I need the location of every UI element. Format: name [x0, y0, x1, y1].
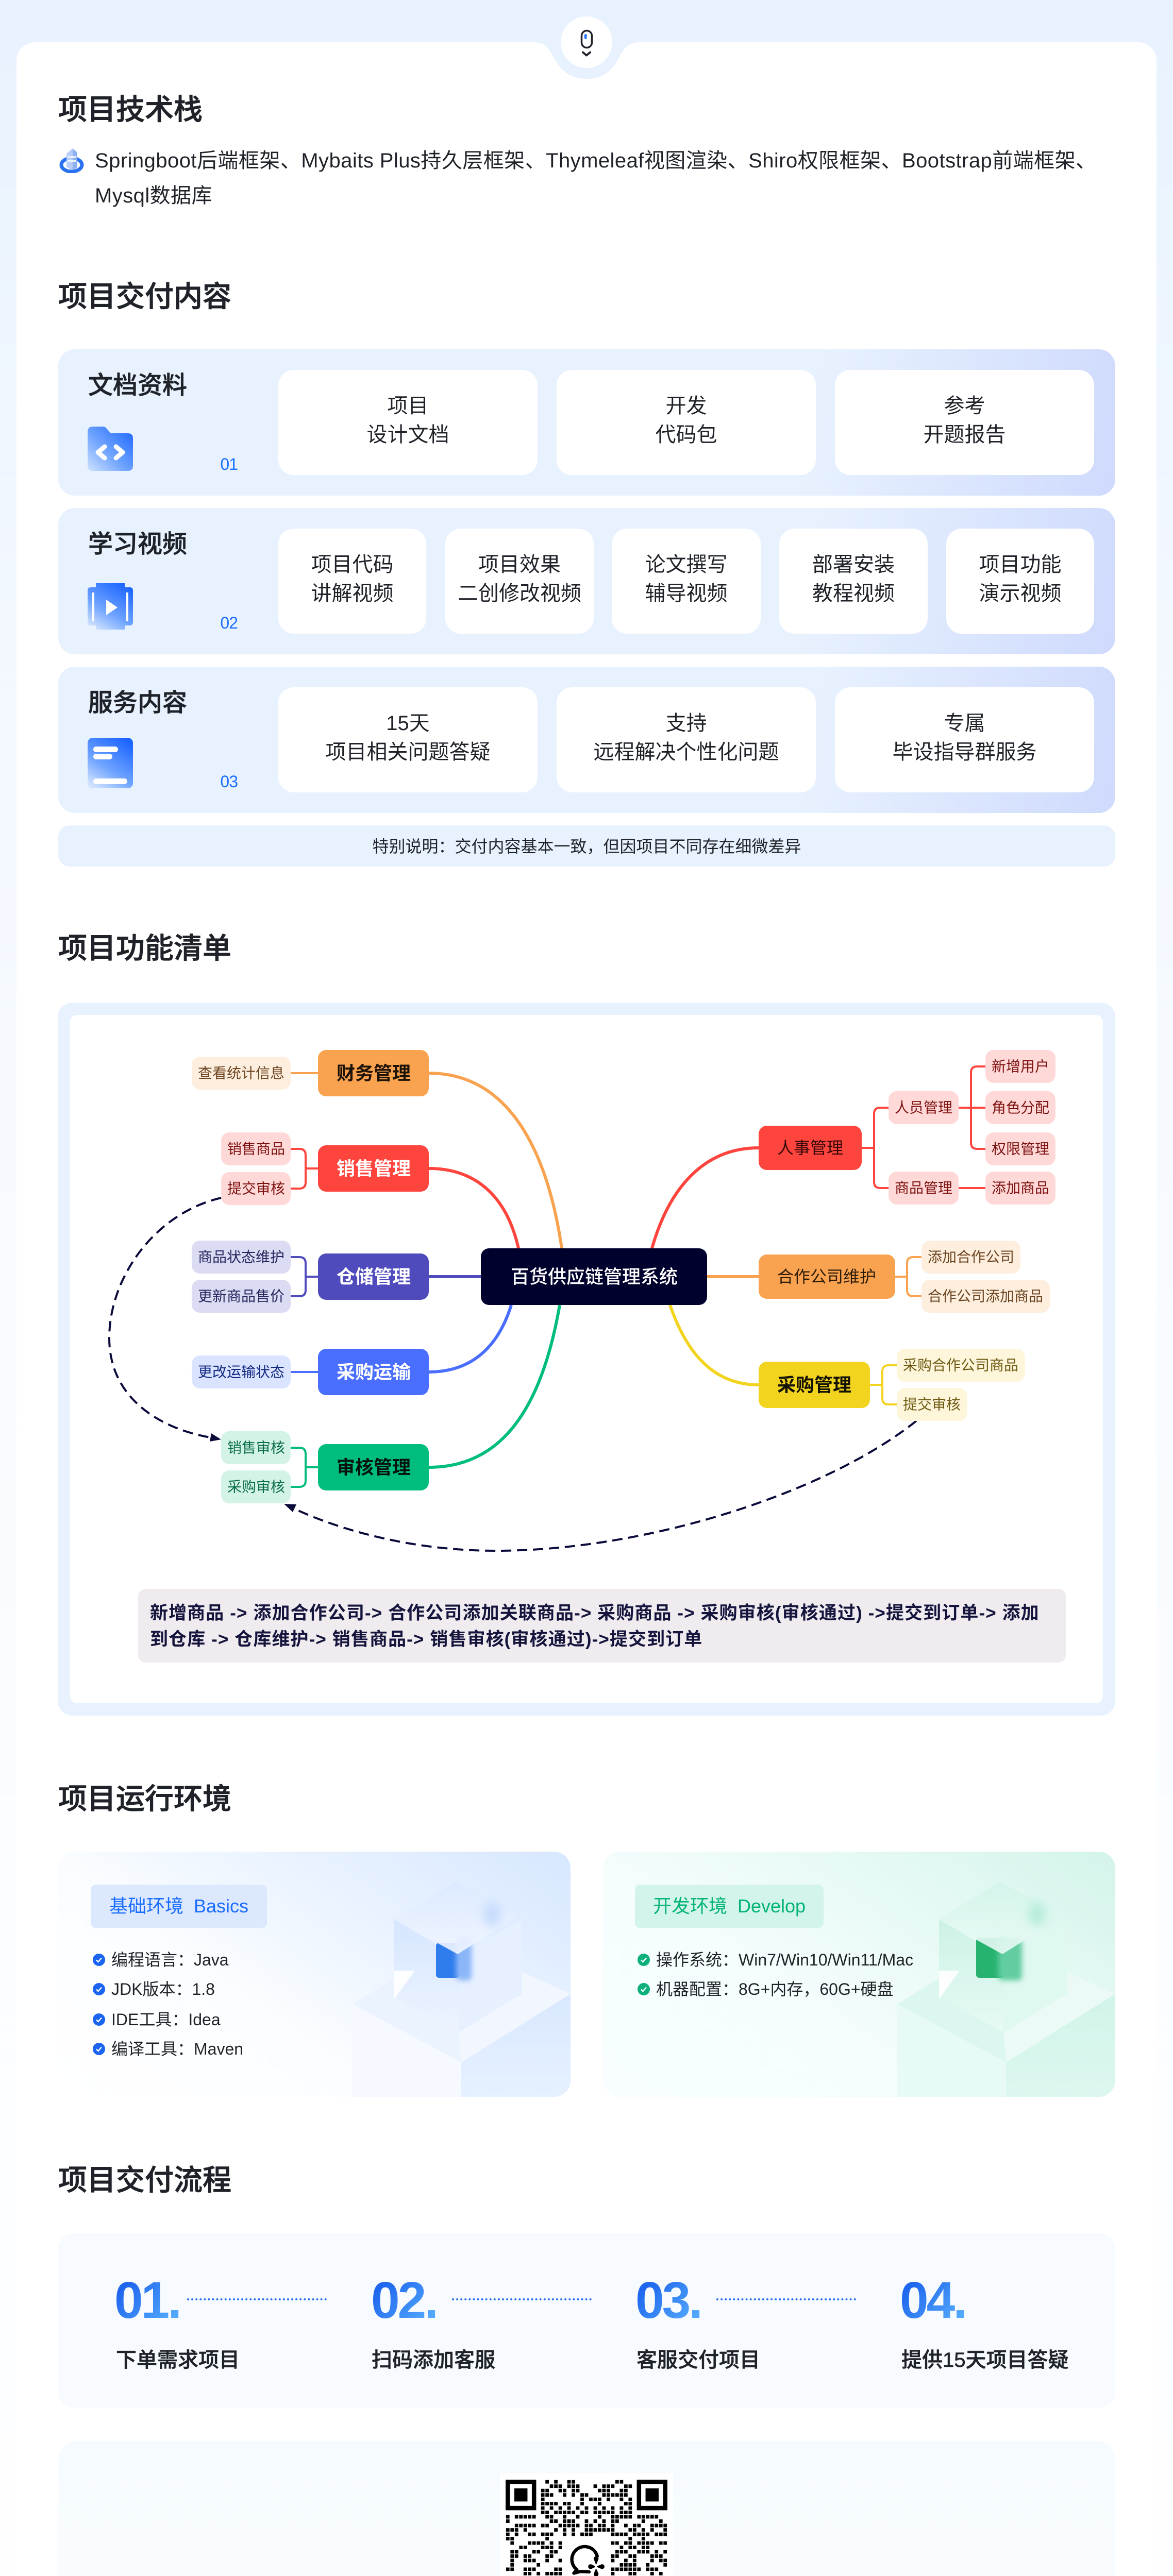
- card: 代码包: [656, 423, 717, 446]
- sub node: 更改运输状态: [198, 1364, 284, 1380]
- node: transport: 采购运输: [337, 1361, 411, 1383]
- card: 支持: [666, 712, 707, 735]
- card: [557, 370, 816, 475]
- card: [612, 529, 761, 634]
- sub node: 采购审核: [227, 1479, 285, 1495]
- panel title: 服务内容: [88, 689, 187, 717]
- card: [445, 529, 594, 634]
- step number 01: 01.: [114, 2272, 180, 2329]
- sub node: 提交审核: [903, 1396, 961, 1413]
- card: 参考: [944, 395, 985, 417]
- tag: 开发环境 Develop: [653, 1895, 806, 1917]
- dashed arrow: purchase review: [284, 1421, 916, 1551]
- heading: process: 项目交付流程: [58, 2164, 231, 2196]
- step number 04: 04.: [900, 2272, 965, 2329]
- card: 毕设指导群服务: [893, 741, 1037, 764]
- heading: environment: 项目运行环境: [58, 1783, 231, 1815]
- sub node: [921, 1280, 1050, 1313]
- sub node: 查看统计信息: [198, 1065, 284, 1081]
- panel: videos: [58, 508, 1115, 654]
- sub node: [192, 1280, 291, 1313]
- card: 项目: [388, 395, 429, 417]
- note bar: [58, 825, 1115, 867]
- sub node: 商品管理: [895, 1180, 952, 1196]
- sub node: [221, 1132, 291, 1165]
- node: sales: [221, 1132, 429, 1205]
- card: 项目效果: [478, 553, 561, 576]
- icon: tech stack crystal: [60, 148, 83, 173]
- node: purchase: [759, 1349, 1025, 1421]
- node: partner company: [759, 1241, 1050, 1313]
- card: [278, 529, 426, 634]
- sub node: [985, 1132, 1055, 1165]
- number: 01: [220, 455, 238, 473]
- flow description: [138, 1589, 1066, 1663]
- icon: service list: [88, 738, 133, 788]
- sub node: 商品状态维护: [198, 1249, 284, 1265]
- card: [835, 370, 1094, 475]
- node: finance: 财务管理: [337, 1062, 411, 1084]
- card: 教程视频: [812, 582, 895, 605]
- card: 开题报告: [924, 423, 1006, 446]
- text: tech stack list: Springboot后端框架、Mybaits Plus持久层框架、Thymeleaf视图渲染、Shiro权限框架、Bootstrap前端框架、: [95, 149, 1097, 172]
- flow description: 到仓库 -> 仓库维护-> 销售商品-> 销售审核(审核通过)->提交到订单: [150, 1629, 702, 1650]
- step number 02: 02.: [371, 2272, 437, 2329]
- step label 3: 客服交付项目: [636, 2349, 760, 2371]
- tag: 基础环境 Basics: [109, 1895, 248, 1917]
- dashed arrow: sales review: [109, 1198, 221, 1442]
- card: 设计文档: [367, 423, 449, 446]
- card: [835, 687, 1094, 792]
- sub node: [221, 1431, 291, 1464]
- card: [779, 529, 928, 634]
- connectors: [429, 1073, 759, 1467]
- root node: [481, 1248, 707, 1305]
- sub node: 添加商品: [992, 1180, 1049, 1196]
- sub node: 新增用户: [992, 1058, 1049, 1075]
- panel: documents: [58, 349, 1115, 496]
- sub node: 权限管理: [992, 1141, 1049, 1157]
- icon: scroll mouse in notch: [535, 16, 638, 79]
- node: partner company: 合作公司维护: [777, 1267, 876, 1286]
- number: 03: [220, 772, 238, 791]
- panel: mind map: [58, 1003, 1115, 1716]
- panel title: 文档资料: [88, 372, 187, 399]
- step label 2: 扫码添加客服: [372, 2349, 495, 2371]
- panel: basic environment: [58, 1852, 571, 2097]
- step label 1: 下单需求项目: [116, 2349, 240, 2371]
- flow description: 新增商品 -> 添加合作公司-> 合作公司添加关联商品-> 采购商品 -> 采购审核(审核通过) ->提交到订单-> 添加: [150, 1603, 1040, 1623]
- sub node: [192, 1057, 291, 1090]
- sub node: 销售审核: [227, 1439, 285, 1456]
- sub node: 更新商品售价: [198, 1288, 284, 1304]
- sub node: [192, 1355, 291, 1388]
- panel: QR background: [58, 2441, 1115, 2576]
- card: 开发: [666, 395, 707, 417]
- card: 项目代码: [311, 553, 394, 576]
- icon: code folder: [88, 427, 133, 471]
- node: transport: [192, 1349, 429, 1395]
- node: warehouse: 仓储管理: [337, 1266, 411, 1287]
- step label 4: 提供15天项目答疑: [901, 2349, 1069, 2371]
- card: 远程解决个性化问题: [594, 741, 779, 764]
- sub node: [985, 1172, 1055, 1205]
- sub node: 销售商品: [227, 1141, 285, 1157]
- panel title: 学习视频: [88, 531, 187, 558]
- card: 讲解视频: [311, 582, 394, 605]
- sub node: 采购合作公司商品: [903, 1357, 1018, 1374]
- illustration: frosted cube: [603, 1852, 1115, 2097]
- card: [278, 687, 538, 792]
- sub node: 添加合作公司: [928, 1249, 1014, 1265]
- root node: 百货供应链管理系统: [511, 1266, 678, 1287]
- tag: [91, 1885, 267, 1928]
- node: HR: 人事管理: [777, 1139, 843, 1157]
- list item: 机器配置：8G+内存，60G+硬盘: [656, 1980, 894, 1998]
- card: [278, 370, 538, 475]
- sub node: [985, 1091, 1055, 1124]
- step number 03: 03.: [635, 2272, 701, 2329]
- list item: JDK版本：1.8: [111, 1980, 215, 1998]
- text: tech stack list: [95, 149, 1097, 207]
- node: finance: [192, 1050, 429, 1096]
- node: review: [221, 1431, 429, 1503]
- icon: QR centre logo: [572, 2547, 605, 2576]
- sub node: [221, 1172, 291, 1205]
- sub node: [889, 1091, 959, 1124]
- number: 02: [220, 614, 238, 632]
- node: sales: 销售管理: [337, 1158, 411, 1179]
- card: 部署安装: [812, 553, 895, 576]
- sub node: [221, 1470, 291, 1503]
- list item: 编译工具：Maven: [111, 2040, 243, 2058]
- heading: tech stack: 项目技术栈: [58, 93, 203, 126]
- sub node: [897, 1388, 967, 1421]
- list item: 操作系统：Win7/Win10/Win11/Mac: [656, 1951, 913, 1969]
- list item: IDE工具：Idea: [111, 2010, 221, 2029]
- card: 二创修改视频: [458, 582, 581, 605]
- panel: process background: [58, 2233, 1115, 2408]
- note bar: 特别说明：交付内容基本一致，但因项目不同存在细微差异: [372, 837, 801, 856]
- card: 15天: [386, 712, 430, 735]
- card: [946, 529, 1094, 634]
- node: HR: [759, 1050, 1055, 1205]
- sub node: 角色分配: [992, 1099, 1049, 1116]
- sub node: 提交审核: [227, 1181, 285, 1196]
- card: [557, 687, 816, 792]
- panel: dev environment: [603, 1852, 1115, 2097]
- illustration: frosted cube: [353, 1901, 571, 2097]
- card: 演示视频: [979, 582, 1062, 605]
- node: warehouse: [192, 1241, 429, 1313]
- QR code: [500, 2473, 673, 2576]
- sub node: [192, 1241, 291, 1274]
- sub node: 合作公司添加商品: [928, 1288, 1043, 1304]
- tag: [635, 1885, 824, 1928]
- sub node: [985, 1050, 1055, 1083]
- card: 论文撰写: [645, 553, 728, 576]
- card: 项目功能: [979, 553, 1062, 576]
- sub node: [921, 1241, 1020, 1274]
- node: review: 审核管理: [337, 1457, 411, 1478]
- heading: deliverables: 项目交付内容: [58, 280, 231, 313]
- text: tech stack list: Mysql数据库: [95, 184, 212, 207]
- list item: 编程语言：Java: [111, 1951, 229, 1969]
- card: 专属: [944, 712, 985, 735]
- heading: features: 项目功能清单: [58, 932, 231, 964]
- card: 辅导视频: [645, 582, 728, 605]
- sub node: 人员管理: [895, 1099, 952, 1116]
- card: 项目相关问题答疑: [326, 741, 491, 764]
- sub node: [897, 1349, 1025, 1382]
- sub node: [889, 1172, 959, 1205]
- panel: services: [58, 667, 1115, 813]
- node: purchase: 采购管理: [777, 1375, 851, 1395]
- icon: video: [88, 583, 133, 630]
